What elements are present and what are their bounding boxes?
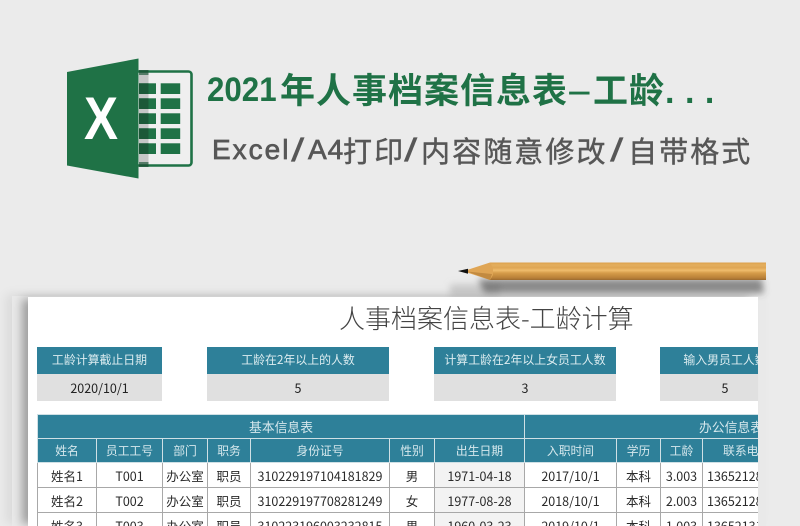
employee table: 姓名2 [51, 490, 83, 510]
employee table: 出生日期 [456, 442, 503, 458]
summary boxes: 2020/10/1 [70, 378, 129, 397]
subtitle: / [404, 132, 417, 168]
title: 年人事档案信息表 [280, 63, 568, 114]
title: – [567, 54, 592, 120]
employee table: 3.003 [666, 466, 697, 484]
pencil taper [467, 262, 493, 280]
employee table: 2.003 [666, 490, 697, 510]
employee table: 入职时间 [547, 442, 594, 458]
letter X: X [84, 85, 118, 152]
subtitle: 自带格式 [628, 129, 752, 171]
employee table: 姓名1 [51, 466, 83, 484]
subtitle: / [610, 132, 623, 168]
summary boxes: 5 [722, 378, 728, 397]
employee table: 学历 [627, 442, 650, 458]
panel: spreadsheet [28, 297, 758, 526]
employee table: 本科 [626, 466, 651, 484]
employee table: 1971-04-18 [447, 466, 512, 484]
summary boxes: 3 [522, 378, 528, 397]
title: 工龄 [593, 63, 665, 114]
employee table: 员工工号 [106, 442, 153, 458]
subtitle: Excel [212, 134, 290, 165]
employee table: 性别 [400, 442, 424, 458]
icon: Excel logo [67, 58, 193, 178]
subtitle: / [291, 132, 304, 168]
employee table: 2018/10/1 [541, 490, 600, 510]
employee table: 基本信息表 [249, 416, 313, 436]
employee table: 办公室 [166, 466, 204, 484]
title: ... [665, 73, 725, 111]
summary boxes: 计算工龄在2年以上女员工人数 [444, 351, 606, 368]
employee table: T002 [115, 490, 144, 510]
subtitle [212, 129, 752, 171]
employee table: 女 [406, 490, 418, 510]
pencil shadow [450, 279, 764, 296]
employee table: 310229197104181829 [258, 466, 382, 484]
front cover [67, 58, 138, 178]
employee table: 部门 [173, 442, 197, 458]
employee table: 男 [406, 466, 418, 484]
subtitle: A4 [308, 134, 344, 165]
icon: pencil [448, 262, 768, 298]
employee table: 310229197708281249 [258, 490, 382, 510]
title [207, 54, 725, 120]
employee table: 2017/10/1 [541, 466, 600, 484]
employee table: 姓名 [55, 442, 79, 458]
subtitle: 内容随意修改 [421, 129, 608, 171]
employee table: 职员 [216, 490, 242, 510]
summary boxes: 工龄计算截止日期 [52, 351, 147, 368]
title: 2021 [207, 71, 277, 109]
subtitle: 打印 [343, 129, 405, 171]
employee table [37, 414, 758, 526]
employee table: 工龄 [670, 442, 693, 458]
employee table: 办公室 [166, 490, 204, 510]
employee table: 本科 [626, 490, 651, 510]
employee table: 身份证号 [296, 442, 344, 458]
employee table: 职员 [216, 466, 242, 484]
employee table: 1977-08-28 [447, 490, 512, 510]
sheet title: 人事档案信息表-工龄计算 [339, 299, 634, 336]
employee table: 职务 [217, 442, 241, 458]
pencil tip [458, 269, 468, 274]
summary boxes: 5 [295, 378, 301, 397]
paper sheet with shadow [12, 296, 766, 526]
pencil body [490, 262, 766, 280]
data clip area [37, 347, 758, 526]
employee table: T001 [115, 466, 144, 484]
summary boxes: 工龄在2年以上的人数 [241, 351, 355, 368]
back sheet [130, 70, 192, 167]
